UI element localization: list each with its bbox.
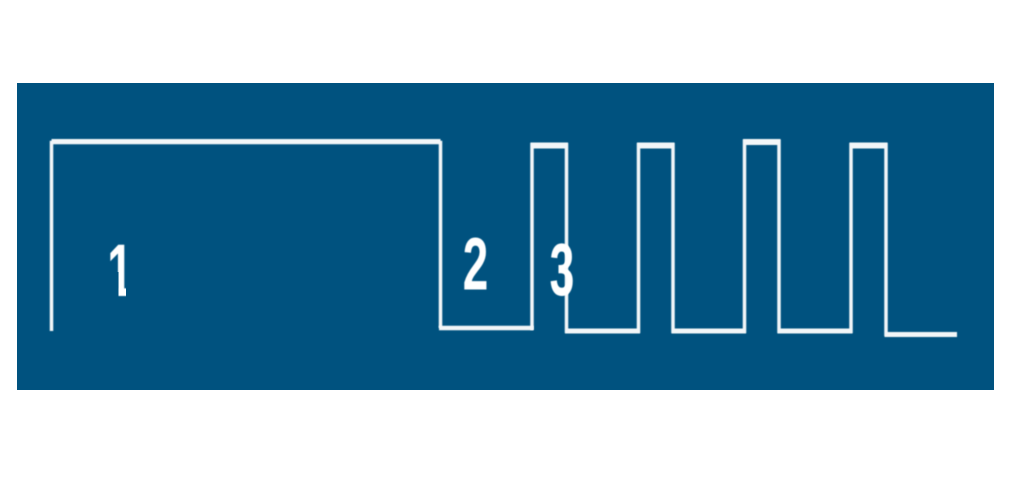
- waveform: gap 2: [439, 326, 534, 330]
- label 2: 2: [463, 223, 488, 306]
- label 1: 1: [107, 230, 133, 313]
- waveform: pulse train 3: [530, 140, 957, 336]
- waveform: long pulse 1: [52, 142, 440, 331]
- label 3: 3: [550, 228, 574, 311]
- pulse diagram: [17, 83, 994, 390]
- panel: blue background: [17, 83, 994, 390]
